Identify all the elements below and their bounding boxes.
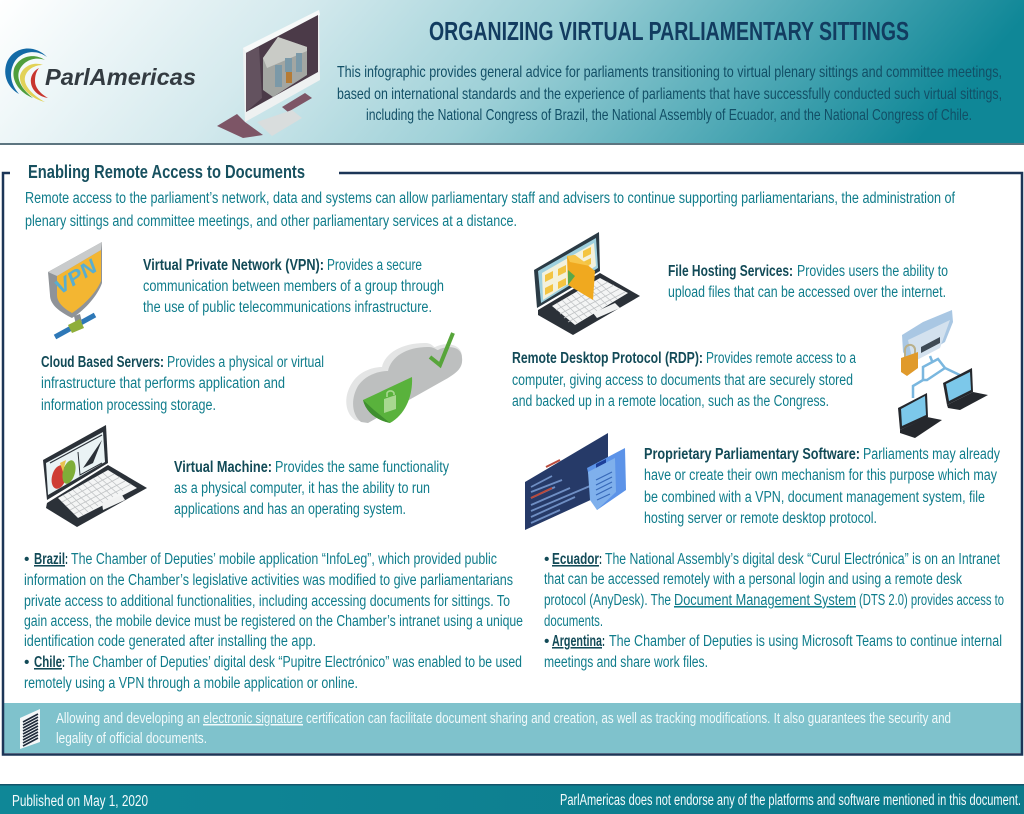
file hosting text: upload files that can be accessed over the internet. [668, 284, 946, 301]
examples: Brazil and Chile: : [65, 551, 68, 568]
remote desktop text: computer, giving access to documents that are securely stored [512, 372, 853, 389]
examples: Ecuador and Argentina: documents. [544, 613, 603, 630]
icon: network of laptops with locked folder [898, 310, 988, 438]
remote desktop text: and backed up in a remote location, such as the Congress. [512, 393, 829, 410]
callout text: legality of official documents. [56, 730, 207, 747]
intro paragraph [25, 190, 956, 230]
examples: Ecuador and Argentina: Ecuador [552, 551, 599, 568]
examples: Brazil and Chile: private access to additional functionalities, including accessing documents for sittings. To [24, 593, 510, 610]
icon: VPN shield: VPN [51, 255, 102, 299]
examples: Ecuador and Argentina: • [544, 633, 549, 650]
examples: Ecuador and Argentina: protocol (AnyDesk). The [544, 592, 671, 609]
examples: Brazil and Chile: • [24, 654, 29, 671]
examples: Ecuador and Argentina [544, 551, 1004, 671]
icon: cloud with shield and check [346, 333, 462, 423]
header banner [0, 0, 1024, 145]
icon: document [20, 709, 40, 749]
intro text [337, 64, 1002, 124]
heading: Enabling Remote Access to Documents [28, 162, 305, 182]
examples: Brazil and Chile: gain access, the mobile device must be registered on the Chamber’s intranet using a unique [24, 613, 523, 630]
examples: Brazil and Chile: Brazil [34, 551, 65, 568]
VPN text [143, 257, 444, 316]
examples: Ecuador and Argentina: • [544, 551, 549, 568]
callout text: Allowing and developing an [56, 710, 200, 727]
proprietary software text [644, 446, 1000, 527]
file hosting text: File Hosting Services: [668, 263, 793, 280]
cloud servers text: Provides a physical or virtual [167, 354, 324, 371]
virtual machine text: Provides the same functionality [275, 459, 449, 476]
panel: enabling remote access to documents [3, 162, 1022, 754]
examples: Brazil and Chile: The Chamber of Deputies’ mobile application “InfoLeg”, which provided public [71, 551, 497, 568]
examples: Ecuador and Argentina: Document Management System [674, 592, 856, 609]
VPN text: communication between members of a group through [143, 278, 444, 295]
proprietary software text: Proprietary Parliamentary Software: [644, 446, 860, 463]
VPN text: the use of public telecommunications infrastructure. [143, 299, 432, 316]
examples: Ecuador and Argentina: meetings and share work files. [544, 654, 708, 671]
examples: Ecuador and Argentina: : [602, 633, 605, 650]
cloud servers text: infrastructure that performs application and [41, 375, 285, 392]
virtual machine text: Virtual Machine: [174, 459, 272, 476]
icon: monitor with parliament building [217, 10, 320, 138]
callout: electronic signature [4, 703, 1021, 753]
icon: laptop with folder [534, 232, 640, 335]
examples: Brazil and Chile [24, 551, 523, 692]
examples: Ecuador and Argentina: : [599, 551, 602, 568]
footer [0, 784, 1024, 814]
cloud servers text: Cloud Based Servers: [41, 354, 164, 371]
cloud servers text [41, 354, 324, 414]
remote desktop text [512, 350, 856, 410]
VPN text: Provides a secure [327, 257, 422, 274]
publication date: Published on May 1, 2020 [12, 793, 148, 810]
file hosting text [668, 263, 948, 301]
callout text: electronic signature [203, 710, 303, 727]
virtual machine text: as a physical computer, it has the ability to run [174, 480, 430, 497]
remote desktop text: Remote Desktop Protocol (RDP): [512, 350, 703, 367]
virtual machine text [174, 459, 449, 518]
logo: ParlAmericas: ParlAmericas [45, 64, 196, 90]
examples: Brazil and Chile: identification code generated after installing the app. [24, 633, 316, 650]
icon: VPN shield [48, 242, 102, 337]
examples: Brazil and Chile: : [62, 654, 65, 671]
examples: Brazil and Chile: Chile [34, 654, 62, 671]
intro paragraph: plenary sittings and committee meetings, and other parliamentary services at a distance. [25, 213, 517, 230]
icon: laptop with charts [43, 425, 147, 527]
examples: Ecuador and Argentina: Argentina [552, 633, 602, 650]
examples: Brazil and Chile: • [24, 551, 29, 568]
VPN text: Virtual Private Network (VPN): [143, 257, 324, 274]
examples: Brazil and Chile: remotely using a VPN through a mobile application or online. [24, 675, 358, 692]
examples: Brazil and Chile: information on the Chamber’s legislative activities was modified to give parliamentarians [24, 572, 513, 589]
icon: proprietary software screen and documents [525, 433, 626, 530]
proprietary software text: hosting server or remote desktop protocol. [644, 510, 877, 527]
logo: ParlAmericas [5, 48, 196, 102]
remote desktop text: Provides remote access to a [706, 350, 856, 367]
callout text [56, 710, 951, 747]
file hosting text: Provides users the ability to [797, 263, 948, 280]
examples: Brazil and Chile: The Chamber of Deputies’ digital desk “Pupitre Electrónico” was enabled to be used [68, 654, 522, 671]
virtual machine text: applications and has an operating system. [174, 501, 406, 518]
cloud servers text: information processing storage. [41, 397, 216, 414]
